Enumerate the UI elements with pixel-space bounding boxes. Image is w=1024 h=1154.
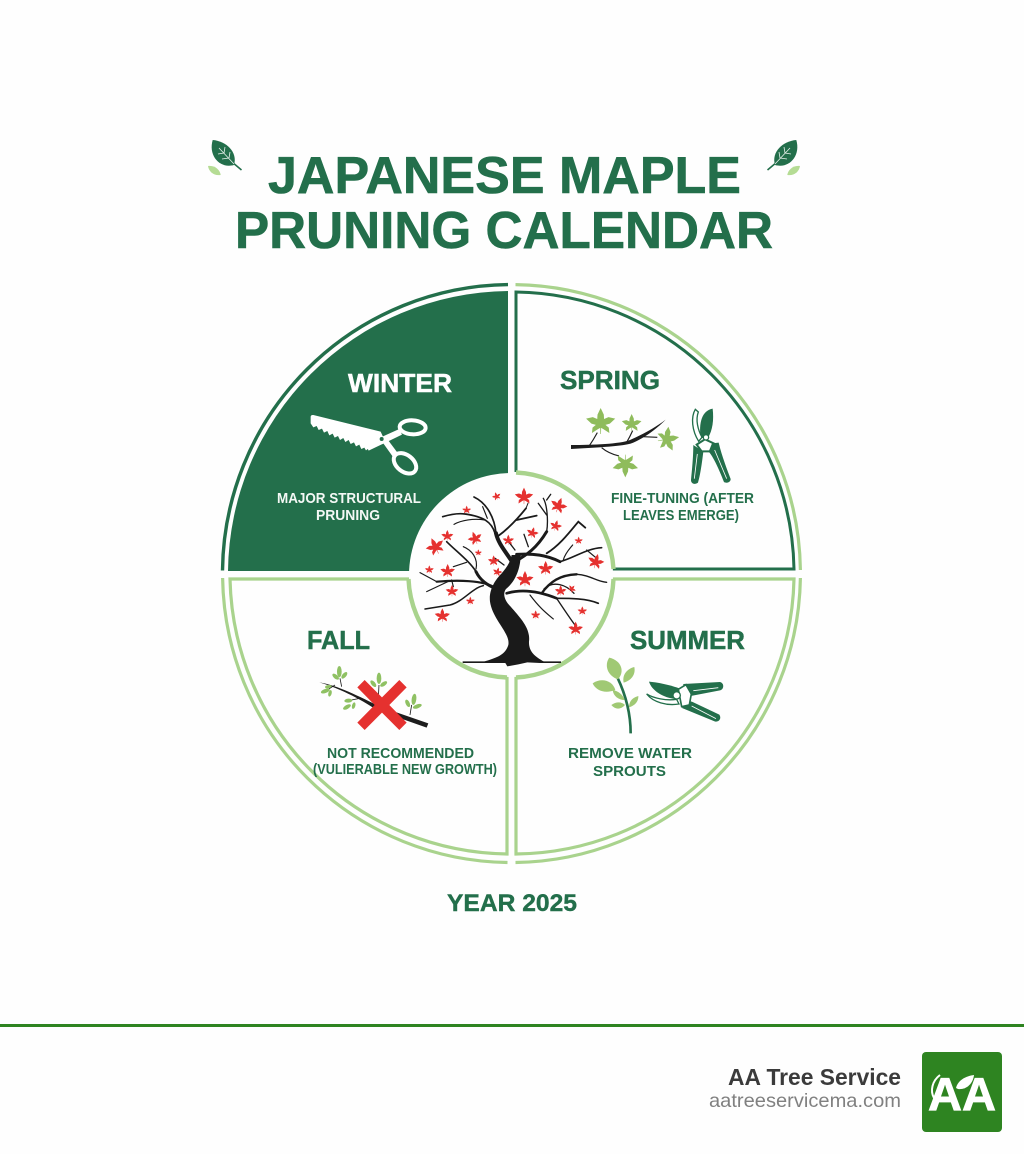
icon: water sprout [593, 658, 638, 733]
summer inner outline [516, 579, 794, 854]
panel: summer [516, 578, 800, 862]
fall outer arc [223, 578, 508, 862]
fall heading: FALL [307, 625, 370, 655]
hub background [409, 473, 613, 677]
fall description: (VULIERABLE NEW GROWTH) [313, 761, 497, 778]
spring inner outline [516, 292, 794, 569]
footer brand text [709, 1064, 901, 1112]
fall inner outline [230, 579, 507, 854]
footer rule [0, 1024, 1024, 1027]
spring description [611, 490, 754, 524]
winter filled sector [228, 291, 508, 571]
icon: left title leaves [208, 140, 242, 175]
icon: pruning saw [311, 415, 426, 478]
winter heading: WINTER [348, 368, 452, 398]
summer outer arc [516, 578, 800, 862]
title: JAPANESE MAPLE [268, 147, 741, 205]
winter description: PRUNING [316, 507, 380, 524]
icon: right title leaves [768, 140, 800, 175]
spring description: FINE-TUNING (AFTER [611, 490, 754, 507]
spring heading: SPRING [560, 365, 660, 395]
icon: leafy branch [571, 408, 681, 477]
year label: YEAR 2025 [447, 890, 577, 917]
winter description [277, 490, 421, 524]
title [235, 147, 773, 260]
winter outer arc [222, 285, 508, 570]
spring description: LEAVES EMERGE) [623, 507, 739, 524]
panel: spring [516, 285, 800, 570]
footer brand text: AA Tree Service [728, 1064, 901, 1090]
panel: winter [222, 285, 508, 571]
hub ring segments [408, 472, 614, 678]
tree trunk and branches [420, 494, 607, 666]
summer description: SPROUTS [593, 763, 666, 780]
summer description [568, 745, 692, 780]
icon: pruning shears [647, 682, 723, 722]
panel: fall [223, 578, 508, 862]
fall description [313, 745, 497, 778]
footer logo: AA [928, 1068, 996, 1120]
footer brand text: aatreeservicema.com [709, 1090, 901, 1112]
title: PRUNING CALENDAR [235, 202, 773, 260]
icon: crossed-out branch [319, 666, 428, 730]
center hub with tree [408, 472, 614, 678]
footer logo [922, 1052, 1002, 1132]
fall description: NOT RECOMMENDED [327, 745, 474, 762]
spring outer arc [516, 285, 800, 570]
summer description: REMOVE WATER [568, 745, 692, 762]
summer heading: SUMMER [630, 625, 745, 655]
illustration: maple tree [420, 488, 607, 666]
winter description: MAJOR STRUCTURAL [277, 490, 421, 507]
icon: bypass pruners [691, 409, 731, 484]
red maple leaves [423, 488, 606, 635]
